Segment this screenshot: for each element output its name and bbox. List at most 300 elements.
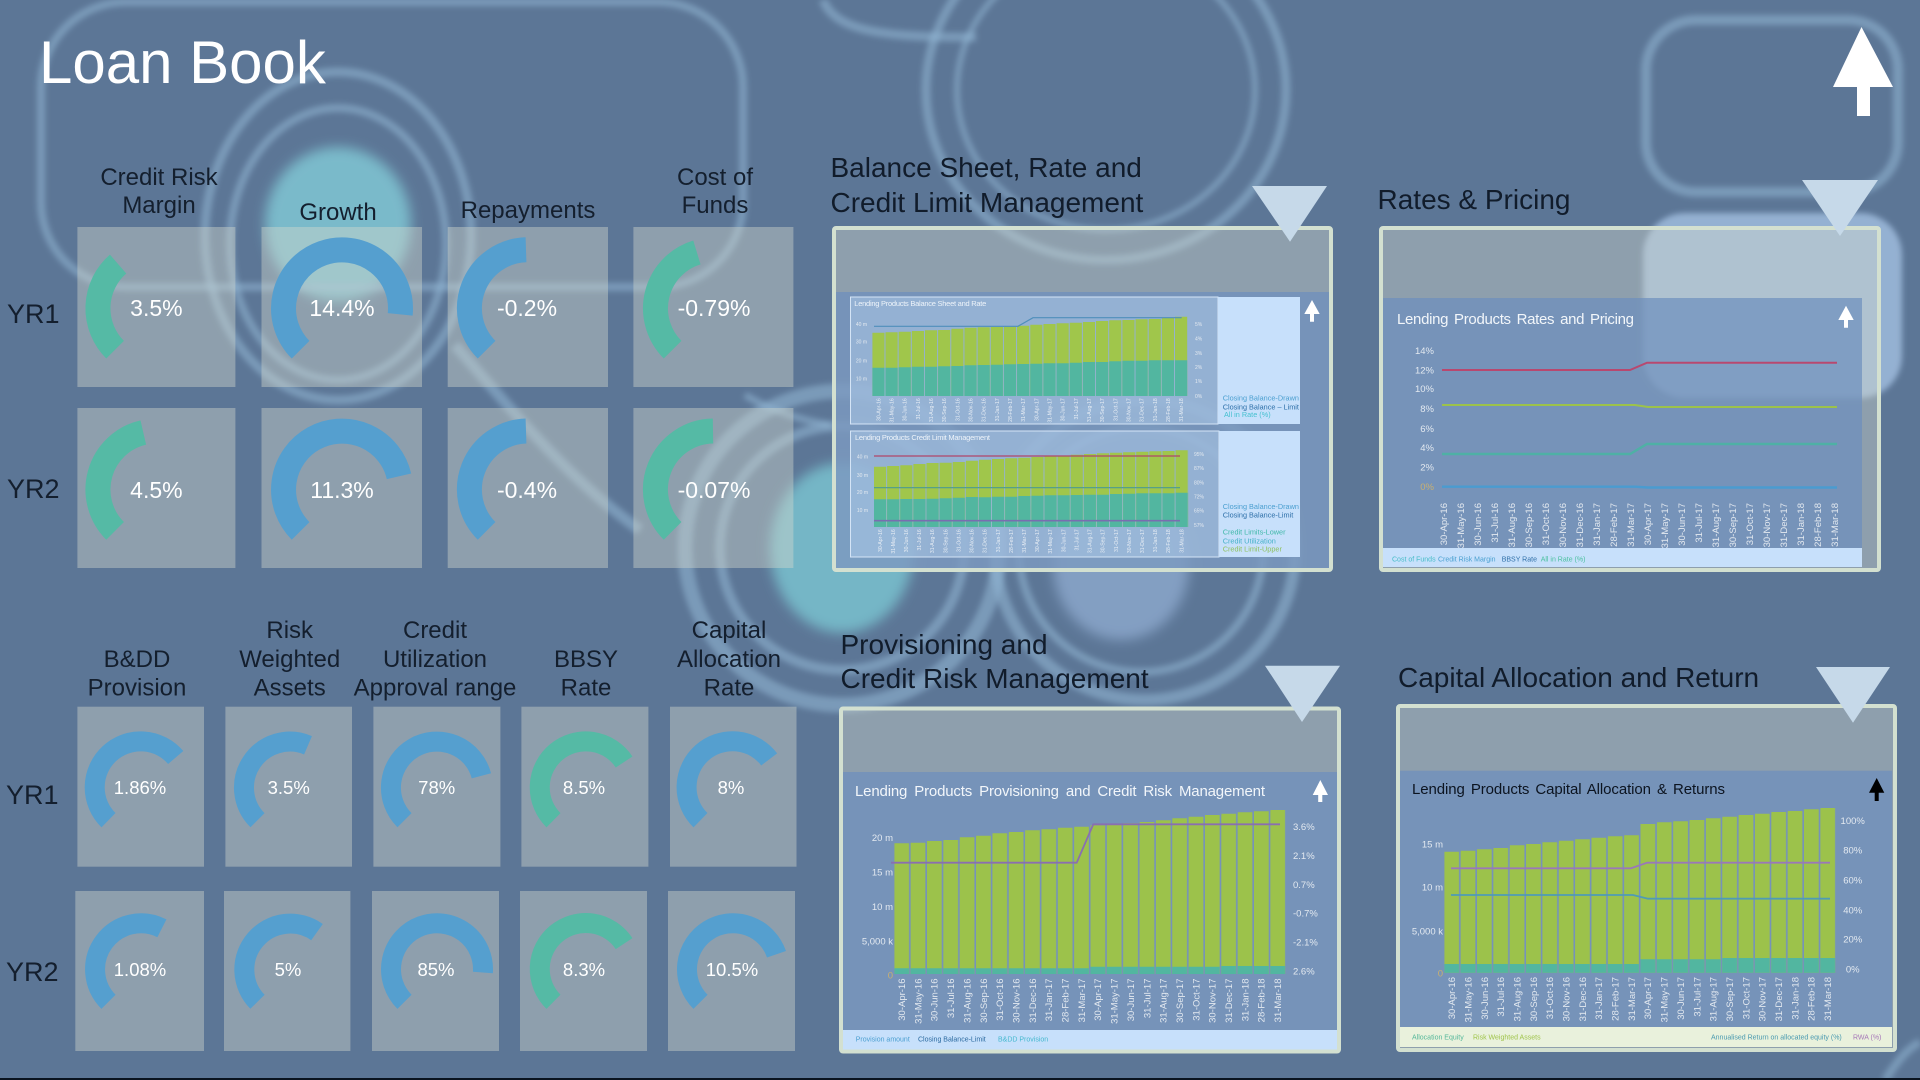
gauge: Growth YR1: 14.4% xyxy=(309,295,375,321)
x axis dates: 31-Aug-17 xyxy=(1711,503,1722,547)
x axis dates: 31-Jan-18 xyxy=(1153,398,1159,421)
gauge: Credit Utilization YR1 xyxy=(373,707,500,867)
heading: Credit Utilization Approval range: Utilization xyxy=(383,646,487,673)
left axis: 20 m xyxy=(857,490,868,496)
x axis dates: 31-Oct-17 xyxy=(1191,978,1202,1021)
x axis dates: 28-Feb-18 xyxy=(1166,529,1172,553)
right axis: 0% xyxy=(1846,964,1860,976)
legend strip: Credit Risk Margin xyxy=(1438,556,1496,564)
x axis dates: 30-Jun-17 xyxy=(1061,529,1067,552)
x axis dates: 31-Jan-18 xyxy=(1153,529,1159,552)
x axis dates: 30-Jun-16 xyxy=(904,529,910,552)
right axis: 40% xyxy=(1843,906,1863,916)
x axis dates: 30-Nov-17 xyxy=(1126,398,1132,422)
x axis dates: 31-Jan-17 xyxy=(995,398,1001,421)
x axis dates: 30-Nov-16 xyxy=(1562,977,1572,1021)
x axis dates: 31-Dec-17 xyxy=(1140,529,1146,553)
x axis dates: 30-Apr-17 xyxy=(1093,978,1104,1021)
x axis dates: 31-Oct-16 xyxy=(1545,977,1556,1019)
row label YR2 lower: YR2 xyxy=(6,957,59,987)
x axis dates: 31-Jan-18 xyxy=(1240,978,1251,1021)
gauge: Cost of Funds YR2: -0.07% xyxy=(678,477,750,503)
return and RWA lines xyxy=(1451,863,1830,899)
x axis dates: 30-Sep-16 xyxy=(979,978,990,1023)
right axis xyxy=(1194,452,1205,529)
heading: Provisioning: Credit Risk Management xyxy=(840,663,1149,694)
heading: Provisioning: Provisioning and xyxy=(840,629,1048,660)
gauge: Growth YR1 xyxy=(262,227,422,387)
y axis labels: 14% xyxy=(1415,346,1435,357)
x axis dates: 28-Feb-17 xyxy=(1610,977,1622,1021)
gauge: B&DD Provision YR2: 1.08% xyxy=(114,959,166,980)
x axis dates: 31-Dec-17 xyxy=(1224,978,1235,1023)
x axis dates: 31-Dec-16 xyxy=(1575,503,1586,547)
x axis dates: 30-Jun-17 xyxy=(1677,503,1688,546)
x axis dates: 31-Mar-18 xyxy=(1273,978,1284,1022)
x axis dates: 30-Nov-16 xyxy=(1012,978,1022,1023)
left axis: 10 m xyxy=(1422,882,1443,894)
gauge: Credit Risk Margin YR1 xyxy=(77,227,235,387)
x axis dates: 31-May-16 xyxy=(890,398,896,423)
x axis dates: 31-Jul-17 xyxy=(1074,398,1080,420)
x axis dates: 31-Jan-18 xyxy=(1796,503,1807,546)
icon: down triangle xyxy=(1252,186,1327,242)
x axis dates: 30-Jun-17 xyxy=(1676,977,1687,1020)
heading: Capital Allocation and Return: Capital Allocation and Return xyxy=(1398,662,1759,693)
left axis: 0 xyxy=(1438,968,1443,980)
legend pane: credit limit: Closing Balance-Drawn xyxy=(1223,502,1299,511)
x axis dates: 31-Mar-17 xyxy=(1077,978,1088,1022)
x axis dates: 31-Jul-17 xyxy=(1074,529,1080,551)
x axis dates: 30-Jun-16 xyxy=(1473,503,1484,546)
heading: BBSY Rate: Rate xyxy=(561,675,611,702)
x axis dates: 28-Feb-17 xyxy=(1060,978,1072,1022)
heading: Risk Weighted Assets: Risk xyxy=(266,617,314,644)
x axis dates: 31-Aug-16 xyxy=(929,398,935,422)
x axis dates: 30-Sep-16 xyxy=(1529,977,1540,1021)
right axis: 80% xyxy=(1843,846,1863,856)
legend strip: Risk Weighted Assets xyxy=(1473,1034,1541,1042)
x axis dates: 31-Jul-16 xyxy=(946,978,957,1018)
x axis dates: 31-Mar-18 xyxy=(1830,503,1841,547)
x axis dates: 31-Jul-16 xyxy=(917,529,923,551)
legend pane: balance sheet: Closing Balance-Drawn xyxy=(1223,394,1299,403)
right axis: 60% xyxy=(1843,876,1863,886)
x axis dates: 30-Sep-17 xyxy=(1100,398,1106,422)
gauge: Risk Weighted Assets YR1 xyxy=(225,707,352,867)
chart area xyxy=(836,292,1329,568)
right axis: 65% xyxy=(1194,508,1205,514)
x axis dates: 31-Dec-17 xyxy=(1140,398,1146,422)
x axis dates xyxy=(897,978,1284,1024)
gauge: Credit Utilization YR2 xyxy=(372,891,499,1051)
gauge: Capital Allocation Rate YR1 xyxy=(670,707,796,867)
x axis dates: 31-Aug-16 xyxy=(962,978,973,1023)
legend strip: Allocation Equity xyxy=(1412,1034,1464,1042)
gauge: Capital Allocation Rate YR1: 8% xyxy=(718,777,744,798)
x axis dates: 31-May-17 xyxy=(1660,977,1671,1022)
rate line xyxy=(874,318,1182,326)
x axis dates: 31-Dec-16 xyxy=(983,529,989,553)
right axis: 95% xyxy=(1194,452,1205,458)
heading: Balance Sheet: Credit Limit Management xyxy=(830,187,1144,218)
x axis dates: 31-May-17 xyxy=(1660,503,1671,548)
x axis dates: 30-Sep-16 xyxy=(1524,503,1535,547)
left axis: 20 m xyxy=(872,833,893,844)
x axis dates: 30-Apr-17 xyxy=(1643,503,1654,545)
x axis dates: 30-Nov-17 xyxy=(1208,978,1219,1023)
bars xyxy=(874,450,1189,527)
panel frame xyxy=(841,708,1339,1052)
x axis dates: 31-Jan-17 xyxy=(1592,503,1603,546)
y axis labels: 2% xyxy=(1420,462,1435,474)
right axis: 72% xyxy=(1194,494,1205,500)
x axis dates: 30-Apr-17 xyxy=(1035,529,1041,552)
icon: black up arrow xyxy=(1869,778,1884,801)
line chart xyxy=(1442,363,1837,488)
right axis: 2% xyxy=(1195,365,1203,371)
x axis dates xyxy=(876,398,1185,423)
x axis dates: 28-Feb-18 xyxy=(1813,503,1824,547)
x axis dates: 28-Feb-18 xyxy=(1257,978,1268,1022)
gauge: Capital Allocation Rate YR2: 10.5% xyxy=(706,959,758,980)
panel: Balance Sheet, Rate and Credit Limit Management xyxy=(830,152,1331,570)
legend pane: balance sheet: All in Rate (%) xyxy=(1224,410,1271,419)
left axis: 20 m xyxy=(856,358,867,364)
x axis dates: 31-Aug-17 xyxy=(1159,978,1170,1023)
gauge: Credit Risk Margin YR2: 4.5% xyxy=(130,477,183,503)
x axis dates: 31-Oct-17 xyxy=(1745,503,1756,545)
heading: Growth: Growth xyxy=(299,199,377,226)
icon: down triangle xyxy=(1802,180,1878,236)
x axis dates: 30-Sep-17 xyxy=(1101,529,1107,553)
x axis dates: 30-Apr-17 xyxy=(1034,398,1040,421)
x axis dates: 31-Dec-17 xyxy=(1779,503,1790,547)
x axis dates: 28-Feb-17 xyxy=(1009,529,1015,553)
gauge: Credit Utilization YR1: 78% xyxy=(418,777,455,798)
left axis: 40 m xyxy=(857,454,868,460)
y axis labels: 10% xyxy=(1415,384,1435,395)
x axis dates: 31-May-16 xyxy=(1456,503,1467,548)
x axis dates: 31-Oct-16 xyxy=(956,529,962,552)
left axis: 5,000 k xyxy=(862,936,893,948)
chart: Balance Sheet and Rate xyxy=(850,297,1300,424)
heading: Rates & Pricing: Rates & Pricing xyxy=(1378,184,1570,215)
gauge: B&DD Provision YR1: 1.86% xyxy=(114,777,166,798)
heading: Capital Allocation Rate: Capital xyxy=(692,617,766,644)
right axis: 3% xyxy=(1195,351,1203,357)
x axis dates xyxy=(1447,977,1834,1022)
gauge: Growth YR2: 11.3% xyxy=(310,477,374,503)
x axis dates: 30-Sep-16 xyxy=(943,529,949,553)
x axis dates: 31-Jul-17 xyxy=(1694,503,1705,543)
heading: Capital Allocation Rate: Rate xyxy=(704,675,754,702)
x axis dates: 31-Oct-17 xyxy=(1741,977,1752,1019)
right axis: -0.7% xyxy=(1293,908,1318,920)
legend strip: B&DD Provision xyxy=(998,1036,1048,1044)
gauge: Repayments YR1 xyxy=(448,227,608,387)
right axis xyxy=(1293,822,1318,978)
heading: Balance Sheet: Balance Sheet, Rate and xyxy=(830,152,1142,183)
x axis dates: 31-Mar-17 xyxy=(1626,503,1637,547)
x axis dates: 30-Nov-17 xyxy=(1127,529,1133,553)
limit lines xyxy=(874,456,1180,521)
legend strip xyxy=(1383,548,1862,567)
y axis labels: 0% xyxy=(1420,482,1435,493)
gauge: BBSY Rate YR1 xyxy=(521,707,648,867)
left axis xyxy=(862,833,893,982)
right axis: 100% xyxy=(1841,816,1865,827)
x axis dates: 30-Nov-16 xyxy=(1558,503,1569,547)
gauge: Risk Weighted Assets YR2 xyxy=(224,891,350,1051)
panel: Rates & Pricing xyxy=(1378,180,1879,570)
x axis dates: 31-Dec-16 xyxy=(982,398,988,422)
panel: Provisioning and Credit Risk Management xyxy=(840,629,1340,1052)
x axis dates: 30-Jun-16 xyxy=(903,398,909,421)
left axis: 40 m xyxy=(856,322,867,328)
bars xyxy=(872,317,1188,396)
panel frame xyxy=(834,228,1331,570)
x axis dates: 31-May-17 xyxy=(1048,398,1054,423)
right axis: 0% xyxy=(1195,394,1203,400)
x axis dates: 31-Dec-17 xyxy=(1774,977,1785,1021)
x axis dates: 30-Nov-17 xyxy=(1758,977,1769,1021)
gauge: Repayments YR2: -0.4% xyxy=(497,477,557,503)
heading: Repayments: Repayments xyxy=(461,197,595,224)
x axis dates: 31-Jul-16 xyxy=(916,398,922,420)
x axis dates: 31-Oct-16 xyxy=(1541,503,1552,545)
x axis dates: 30-Jun-17 xyxy=(1061,398,1067,421)
x axis dates: 31-Jul-17 xyxy=(1692,977,1703,1017)
x axis dates: 28-Feb-17 xyxy=(1609,503,1620,547)
icon: top navigation up arrow xyxy=(1833,27,1893,116)
y axis labels: 6% xyxy=(1420,424,1435,435)
icon: down triangle xyxy=(1816,667,1890,723)
x axis dates: 31-Aug-17 xyxy=(1087,398,1093,422)
x axis dates: 31-May-17 xyxy=(1048,529,1054,554)
x axis dates: 30-Jun-16 xyxy=(930,978,941,1021)
x axis dates: 30-Sep-17 xyxy=(1728,503,1739,547)
row label YR1: YR1 xyxy=(7,299,60,329)
left axis: 15 m xyxy=(872,868,893,878)
heading: B&DD Provision: B&DD xyxy=(104,646,170,673)
x axis dates: 31-Jul-17 xyxy=(1142,978,1153,1018)
gauge: Credit Risk Margin YR2 xyxy=(77,408,235,568)
legend strip xyxy=(843,1030,1337,1050)
legend strip: Annualised Return on allocated equity (%) xyxy=(1711,1034,1842,1042)
chart title: Lending Products Balance Sheet and Rate xyxy=(854,299,986,308)
legend pane: balance sheet xyxy=(1218,297,1300,424)
x axis dates: 31-Jan-17 xyxy=(1594,977,1605,1020)
icon: white up arrow xyxy=(1313,780,1328,802)
legend pane: credit limit xyxy=(1219,431,1300,557)
right axis: 1% xyxy=(1195,379,1203,385)
x axis dates: 28-Feb-18 xyxy=(1807,977,1818,1021)
provision line xyxy=(891,824,1280,863)
x axis dates: 28-Feb-18 xyxy=(1166,398,1172,422)
gauge: Cost of Funds YR2 xyxy=(633,408,793,568)
x axis dates: 30-Apr-16 xyxy=(1439,503,1450,545)
icon: white up arrow xyxy=(1304,300,1320,322)
gauge: Cost of Funds YR1 xyxy=(633,227,793,387)
heading: Risk Weighted Assets: Weighted xyxy=(239,646,340,673)
right axis: 3.6% xyxy=(1293,822,1315,833)
gauge: B&DD Provision YR2 xyxy=(75,891,204,1051)
x axis dates xyxy=(878,529,1185,554)
left axis xyxy=(856,322,867,382)
chart area xyxy=(1383,298,1862,548)
x axis dates: 31-Dec-16 xyxy=(1028,978,1039,1023)
heading: Risk Weighted Assets: Assets xyxy=(254,675,326,702)
x axis dates: 31-Aug-17 xyxy=(1709,977,1720,1021)
chart area xyxy=(843,772,1337,1030)
x axis dates: 31-Aug-17 xyxy=(1088,529,1094,553)
x axis dates: 31-Mar-17 xyxy=(1021,398,1027,422)
x axis dates: 30-Jun-16 xyxy=(1480,977,1491,1020)
x axis dates: 31-Mar-18 xyxy=(1179,529,1185,553)
x axis dates: 31-May-16 xyxy=(913,978,924,1024)
legend pane: credit limit: Credit Utilization xyxy=(1223,536,1276,545)
gauge: Credit Risk Margin YR1: 3.5% xyxy=(130,295,183,321)
y axis labels: 12% xyxy=(1415,366,1435,376)
right axis: 2.6% xyxy=(1293,966,1315,978)
legend strip: Closing Balance-Limit xyxy=(918,1036,986,1044)
x axis dates: 31-Mar-18 xyxy=(1179,398,1185,422)
right axis: 80% xyxy=(1194,480,1205,486)
left axis: 15 m xyxy=(1422,840,1443,850)
legend strip: BBSY Rate xyxy=(1502,556,1537,564)
x axis dates: 31-Jan-17 xyxy=(996,529,1002,552)
panel frame xyxy=(1398,706,1895,1050)
right axis: -2.1% xyxy=(1293,938,1318,948)
x axis dates: 30-Apr-16 xyxy=(1447,977,1458,1019)
gauge: Capital Allocation Rate YR2 xyxy=(668,891,795,1051)
gauge: BBSY Rate YR2: 8.3% xyxy=(563,959,605,980)
right axis: 57% xyxy=(1194,523,1205,529)
panel: top KPI gauges xyxy=(7,164,793,568)
x axis dates: 31-Aug-16 xyxy=(1512,977,1524,1021)
x axis dates: 31-Jan-18 xyxy=(1790,977,1801,1020)
heading: Credit Risk Margin: Credit Risk xyxy=(100,164,219,191)
left axis: 0 xyxy=(888,970,893,982)
legend pane: credit limit: Credit Limits-Lower xyxy=(1223,527,1286,536)
left axis: 5,000 k xyxy=(1412,926,1443,938)
row label YR2: YR2 xyxy=(7,474,60,504)
x axis dates: 30-Nov-17 xyxy=(1762,503,1773,547)
left axis: 10 m xyxy=(857,508,868,514)
heading: Credit Utilization Approval range: Credit xyxy=(403,617,467,644)
heading: B&DD Provision: Provision xyxy=(88,675,186,702)
heading: Capital Allocation Rate: Allocation xyxy=(677,646,781,673)
left axis: 10 m xyxy=(856,376,867,382)
y axis labels xyxy=(1415,346,1435,493)
legend pane: credit limit: Credit Limit-Upper xyxy=(1223,544,1282,553)
x axis dates: 31-May-17 xyxy=(1110,978,1121,1024)
right axis: 5% xyxy=(1195,322,1203,328)
gauge: B&DD Provision YR1 xyxy=(77,707,204,867)
x axis dates: 31-Oct-16 xyxy=(995,978,1006,1021)
x axis dates: 30-Sep-16 xyxy=(942,398,948,422)
legend strip: All in Rate (%) xyxy=(1541,556,1585,564)
x axis dates: 28-Feb-17 xyxy=(1008,398,1014,422)
chart title: Lending Products Provisioning and Credit Risk Management xyxy=(855,783,1266,800)
right axis: 87% xyxy=(1194,466,1205,472)
right axis: 0.7% xyxy=(1293,880,1315,891)
right axis: 4% xyxy=(1195,336,1203,342)
chart title: Lending Products Capital Allocation & Returns xyxy=(1412,781,1725,798)
gauge: Credit Utilization YR2: 85% xyxy=(417,959,455,980)
x axis dates: 31-Mar-17 xyxy=(1022,529,1028,553)
gauge: Risk Weighted Assets YR2: 5% xyxy=(275,959,301,980)
panel: bottom KPI gauges xyxy=(6,617,796,1051)
x axis dates: 31-Oct-17 xyxy=(1113,398,1119,421)
x axis dates: 31-Oct-16 xyxy=(955,398,961,421)
chart: Credit Limit Management xyxy=(850,431,1300,557)
panel: Capital Allocation and Return xyxy=(1398,662,1895,1050)
x axis dates: 30-Nov-16 xyxy=(968,398,974,422)
x axis dates: 31-Dec-16 xyxy=(1578,977,1589,1021)
right axis: 2.1% xyxy=(1293,851,1315,862)
x axis dates: 31-Jul-16 xyxy=(1496,977,1507,1017)
bars xyxy=(894,810,1286,974)
x axis dates: 31-Mar-17 xyxy=(1627,977,1638,1021)
left axis xyxy=(857,454,868,514)
chart title: Lending Products Credit Limit Management xyxy=(855,433,991,442)
gauge: BBSY Rate YR1: 8.5% xyxy=(563,777,605,798)
bars xyxy=(1444,808,1836,973)
left axis: 30 m xyxy=(857,473,868,479)
x axis dates: 31-Aug-16 xyxy=(930,529,936,553)
x axis dates: 31-May-16 xyxy=(1463,977,1474,1022)
legend pane: credit limit: Closing Balance-Limit xyxy=(1223,511,1293,520)
right axis xyxy=(1195,322,1203,400)
x axis dates: 30-Apr-16 xyxy=(897,978,908,1021)
legend strip: Provision amount xyxy=(856,1036,910,1044)
y axis labels: 8% xyxy=(1420,404,1435,415)
legend pane: balance sheet: Closing Balance – Limit xyxy=(1223,402,1299,411)
x axis dates: 31-May-16 xyxy=(891,529,897,554)
x axis dates xyxy=(1439,503,1841,548)
heading: Credit Risk Margin: Margin xyxy=(122,192,196,219)
right axis: 20% xyxy=(1843,934,1863,946)
icon: white up arrow xyxy=(1838,306,1854,328)
x axis dates: 31-Mar-18 xyxy=(1823,977,1834,1021)
gauge: BBSY Rate YR2 xyxy=(520,891,647,1051)
x axis dates: 30-Nov-16 xyxy=(970,529,976,553)
icon: down triangle xyxy=(1265,666,1340,722)
x axis dates: 31-Oct-17 xyxy=(1114,529,1120,552)
legend strip: RWA (%) xyxy=(1853,1034,1881,1042)
x axis dates: 31-Jul-16 xyxy=(1490,503,1501,543)
gauge: Repayments YR2 xyxy=(448,408,608,568)
x axis dates: 30-Apr-16 xyxy=(878,529,884,552)
chart title: Lending Products Rates and Pricing xyxy=(1397,311,1634,328)
y axis labels: 4% xyxy=(1420,443,1435,454)
x axis dates: 31-Jan-17 xyxy=(1044,978,1055,1021)
gauge: Repayments YR1: -0.2% xyxy=(497,295,557,321)
row label YR1 lower: YR1 xyxy=(6,780,59,810)
x axis dates: 30-Apr-16 xyxy=(876,398,882,421)
left axis xyxy=(1412,840,1443,980)
gauge: Risk Weighted Assets YR1: 3.5% xyxy=(268,777,310,798)
x axis dates: 30-Sep-17 xyxy=(1175,978,1186,1023)
x axis dates: 30-Apr-17 xyxy=(1643,977,1654,1019)
heading: Credit Utilization Approval range: Approval range xyxy=(354,675,516,702)
panel frame xyxy=(1381,228,1879,570)
gauge: Cost of Funds YR1: -0.79% xyxy=(678,295,750,321)
x axis dates: 31-Aug-16 xyxy=(1507,503,1518,547)
title: Loan Book xyxy=(39,29,327,96)
